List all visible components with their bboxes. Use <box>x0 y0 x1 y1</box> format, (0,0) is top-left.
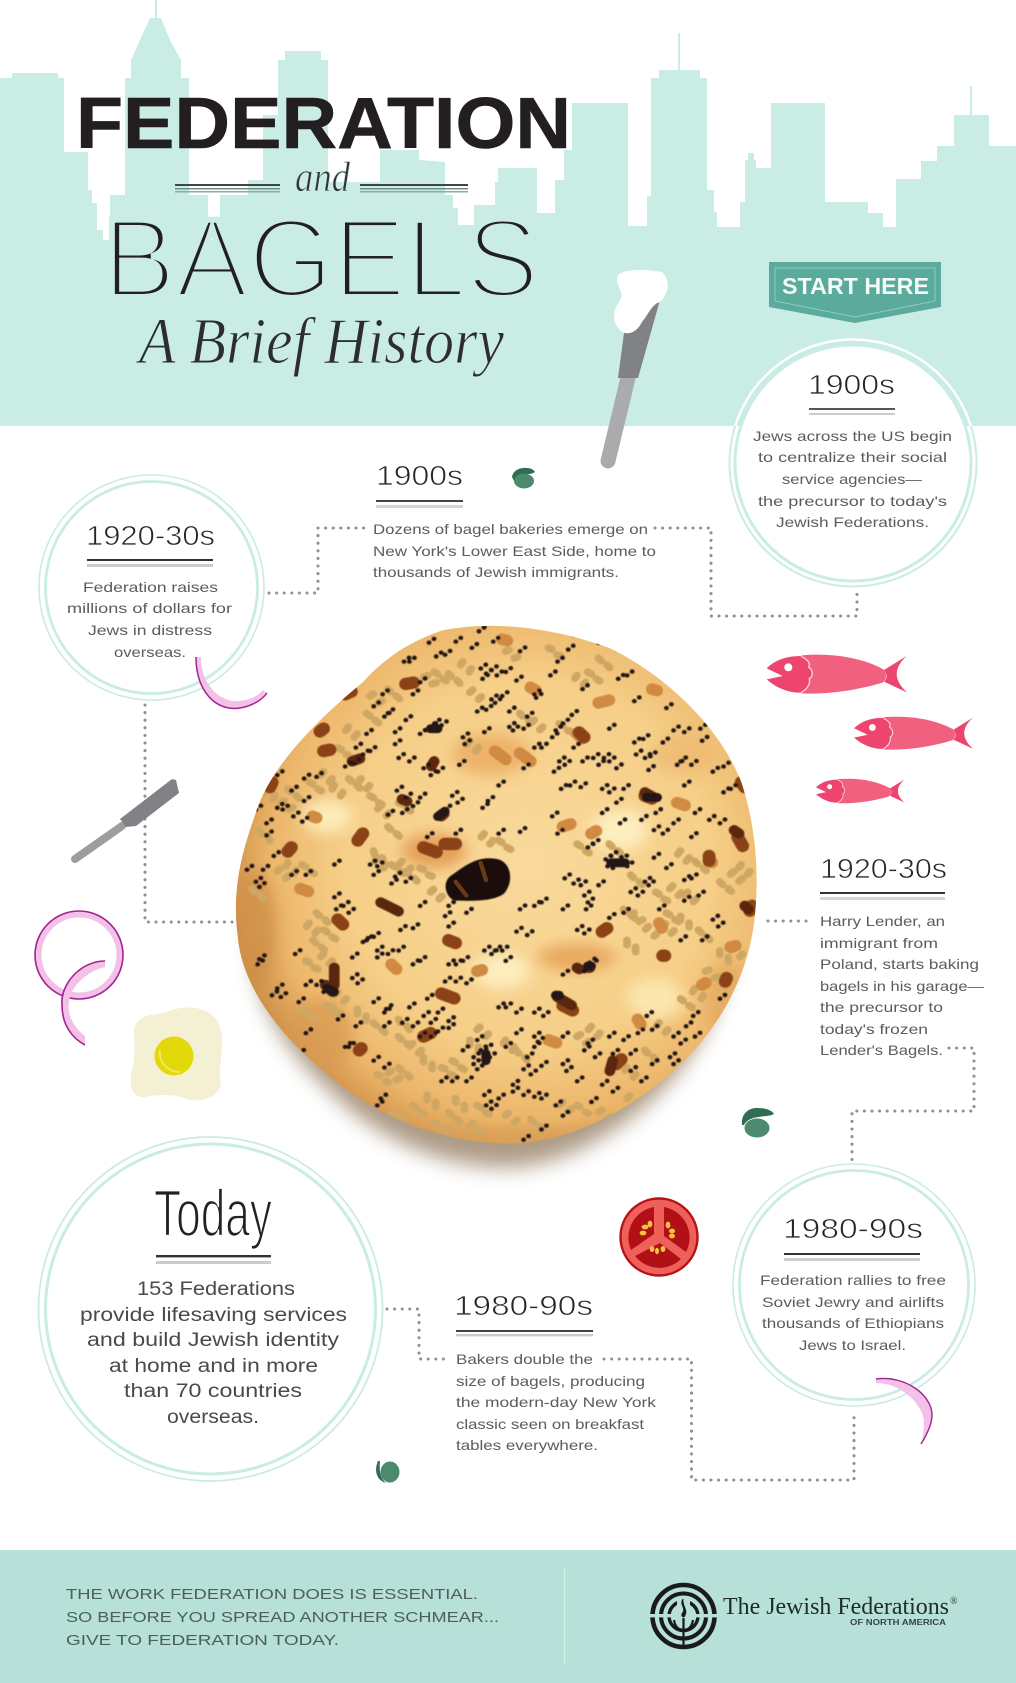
body text: to centralize their social <box>758 449 947 465</box>
call to action text: THE WORK FEDERATION DOES IS ESSENTIAL. <box>66 1586 478 1603</box>
body text <box>373 521 656 580</box>
title <box>76 84 571 378</box>
logo: Jewish Federations: The Jewish Federations <box>723 1594 949 1620</box>
icon: green leaf bottom <box>376 1461 400 1483</box>
body text: classic seen on breakfast <box>456 1416 644 1432</box>
start here banner <box>769 262 941 323</box>
icon: large fish <box>767 655 907 694</box>
connector: dotted lines <box>145 528 974 1480</box>
icon: onion slice by federation circle <box>196 657 267 708</box>
body text: provide lifesaving services <box>80 1305 347 1326</box>
heading: 1980-90s <box>783 1213 923 1244</box>
call to action text: GIVE TO FEDERATION TODAY. <box>66 1632 339 1649</box>
body text: Jews in distress <box>88 622 212 638</box>
heading: 1900s <box>808 369 895 400</box>
body text: Jewish Federations. <box>776 514 929 530</box>
logo: Jewish Federations <box>650 1585 958 1647</box>
sesame seeds <box>252 648 741 1126</box>
start here banner: START HERE <box>782 273 929 299</box>
heading: 1980-90s <box>454 1290 593 1321</box>
logo: Jewish Federations: ® <box>950 1596 958 1607</box>
bagel body and toppings <box>227 623 757 1150</box>
body text: immigrant from <box>820 935 938 951</box>
body text: Soviet Jewry and airlifts <box>762 1294 944 1310</box>
body text: Federation raises <box>83 579 218 595</box>
body text: service agencies— <box>782 471 922 487</box>
body text: Poland, starts baking <box>820 956 979 972</box>
footer divider <box>564 1567 565 1663</box>
body text: today's frozen <box>820 1021 928 1037</box>
heading: 1900s <box>376 460 463 491</box>
body text <box>80 1279 347 1428</box>
body text: New York's Lower East Side, home to <box>373 543 656 559</box>
bagel shadow <box>253 650 734 1167</box>
icon: onion slice by 1980-90s circle <box>876 1378 932 1444</box>
body text: than 70 countries <box>124 1381 302 1402</box>
icon: tomato slice <box>620 1198 698 1276</box>
body text: Jews across the US begin <box>753 428 952 444</box>
icon: small fish <box>816 779 905 803</box>
body text: Jews to Israel. <box>799 1337 906 1353</box>
body text: Lender's Bagels. <box>820 1042 943 1058</box>
bagel hole <box>446 858 510 901</box>
fish school <box>767 655 973 803</box>
footer band <box>0 1550 1016 1683</box>
icon: knife with schmear <box>608 270 668 461</box>
body text: Federation rallies to free <box>760 1272 946 1288</box>
body text <box>753 428 952 530</box>
heading rule <box>376 500 463 508</box>
body text <box>456 1351 657 1453</box>
body text: tables everywhere. <box>456 1437 598 1453</box>
body text: bagels in his garage— <box>820 978 984 994</box>
bagel photo illustration <box>227 623 757 1167</box>
icon: table knife <box>75 779 179 859</box>
panel: today circle <box>38 1137 382 1481</box>
poppy seeds <box>247 627 731 1140</box>
panel: 1980-90s federation circle <box>733 1164 975 1406</box>
panel: 1900s circle <box>730 340 976 586</box>
call to action text <box>66 1586 499 1649</box>
icon: onion ring and curl <box>35 911 123 1045</box>
heading: Today <box>154 1176 272 1250</box>
heading rule <box>809 408 895 415</box>
heading rule <box>156 1255 271 1264</box>
panel: 1920-30s federation circle <box>39 475 264 700</box>
body text: Dozens of bagel bakeries emerge on <box>373 521 648 537</box>
body text: at home and in more <box>109 1356 318 1377</box>
heading: 1920-30s <box>820 853 947 884</box>
heading rule <box>456 1330 593 1336</box>
title: Federation: FEDERATION <box>76 84 571 164</box>
body text: the precursor to today's <box>758 493 947 509</box>
icon: green leaf right <box>742 1108 774 1138</box>
body text: the precursor to <box>820 999 943 1015</box>
body text: Harry Lender, an <box>820 913 945 929</box>
heading rule <box>87 559 213 567</box>
icon: fried egg <box>131 1007 222 1100</box>
body text: overseas. <box>167 1407 259 1428</box>
text block: 1920-30s Lender's <box>820 853 984 1058</box>
body text: the modern-day New York <box>456 1394 657 1410</box>
header band with city skyline <box>0 0 1016 426</box>
title word: and: and <box>295 155 351 201</box>
title rules left <box>175 184 280 192</box>
heading rule <box>784 1253 920 1261</box>
title rules right <box>360 184 468 192</box>
body text: Bakers double the <box>456 1351 593 1367</box>
title: Bagels: BAGELS <box>103 196 539 321</box>
logo: Jewish Federations: OF NORTH AMERICA <box>850 1618 946 1627</box>
icon: green leaf top <box>512 468 535 488</box>
body text: and build Jewish identity <box>87 1330 340 1351</box>
text block: 1980-90s bakers <box>454 1290 657 1453</box>
body text: millions of dollars for <box>67 600 232 616</box>
body text: 153 Federations <box>137 1279 295 1300</box>
heading: 1920-30s <box>86 520 215 551</box>
body text <box>820 913 984 1058</box>
subtitle: A Brief History <box>135 305 505 378</box>
icon: middle fish <box>854 717 973 750</box>
body text: thousands of Ethiopians <box>762 1315 944 1331</box>
body text: thousands of Jewish immigrants. <box>373 564 619 580</box>
heading rule <box>820 892 945 900</box>
body text: overseas. <box>114 644 186 660</box>
text block: 1900s bakeries <box>373 460 656 580</box>
body text <box>760 1272 946 1353</box>
larger poppy clusters <box>327 729 657 1061</box>
call to action text: SO BEFORE YOU SPREAD ANOTHER SCHMEAR... <box>66 1609 499 1626</box>
body text <box>67 579 232 660</box>
body text: size of bagels, producing <box>456 1373 645 1389</box>
toasted onion pieces <box>300 639 736 1043</box>
